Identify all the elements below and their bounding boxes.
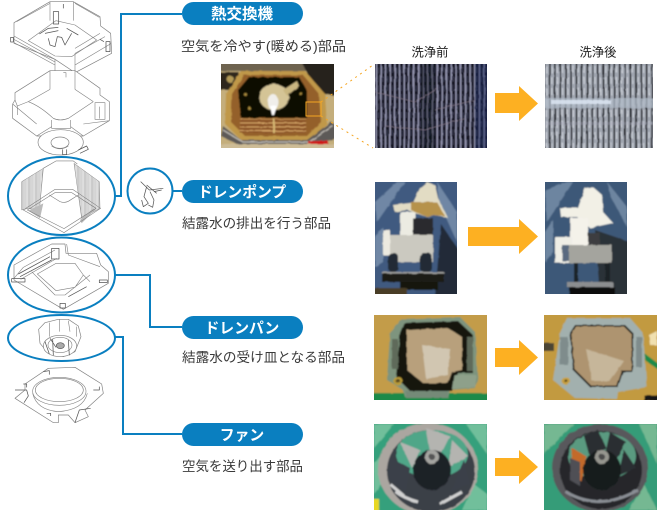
photo: heat exchanger installed in unit [221, 64, 334, 148]
connector: heat exchanger [115, 14, 182, 196]
part: top casing [11, 2, 112, 73]
label pill: drain pump: ドレンポンプ [198, 184, 286, 201]
label pill: heat exchanger: 熱交換機 [211, 4, 273, 23]
zoom indicator with dotted leader lines [306, 65, 373, 148]
part: fan line art [39, 319, 81, 357]
part: heat exchanger line art [22, 161, 101, 233]
photo: drain pump before cleaning [375, 182, 457, 294]
arrow: fan [495, 450, 538, 484]
photo: heat exchanger after cleaning [545, 64, 653, 148]
label pill: drain pan: ドレンパン [205, 320, 279, 337]
photo: heat exchanger before cleaning [375, 64, 487, 148]
photo: fan before cleaning [374, 424, 487, 510]
exploded diagram of cassette air conditioner [11, 2, 112, 423]
part: round plate [38, 130, 88, 155]
photo: drain pan after cleaning [544, 315, 657, 400]
description: drain pan: 結露水の受け皿となる部品 [182, 350, 345, 365]
connector: fan [115, 337, 182, 434]
description: fan: 空気を送り出す部品 [182, 459, 303, 474]
highlight ellipse: heat exchanger [8, 157, 115, 235]
description: heat exchanger: 空気を冷やす(暖める)部品 [181, 39, 346, 54]
label pill: fan: ファン [220, 428, 264, 444]
photo: drain pump after cleaning [545, 182, 627, 294]
part: insulation shell [13, 71, 109, 136]
part: drain pan line art [12, 244, 108, 309]
label pill: drain pump [182, 180, 303, 203]
label pill: drain pan [182, 316, 303, 339]
highlight ellipse: fan [8, 315, 115, 361]
arrow: heat exchanger [495, 86, 538, 121]
label pill: heat exchanger [182, 2, 303, 25]
connector: drain pump [173, 190, 182, 192]
photo: fan after cleaning [544, 424, 657, 510]
arrow: drain pump [468, 219, 538, 254]
part: bottom plate line art [15, 367, 103, 423]
arrow: drain pan [495, 340, 538, 375]
photo: drain pan before cleaning [374, 315, 487, 400]
caption: before cleaning: 洗浄前 [412, 44, 448, 60]
highlight ellipse: drain pan [8, 238, 115, 312]
label pill: fan [182, 423, 303, 446]
description: drain pump: 結露水の排出を行う部品 [182, 216, 331, 231]
connector: drain pan [115, 275, 182, 327]
caption: after cleaning: 洗浄後 [580, 46, 616, 60]
highlight circle: drain pump [128, 168, 172, 214]
